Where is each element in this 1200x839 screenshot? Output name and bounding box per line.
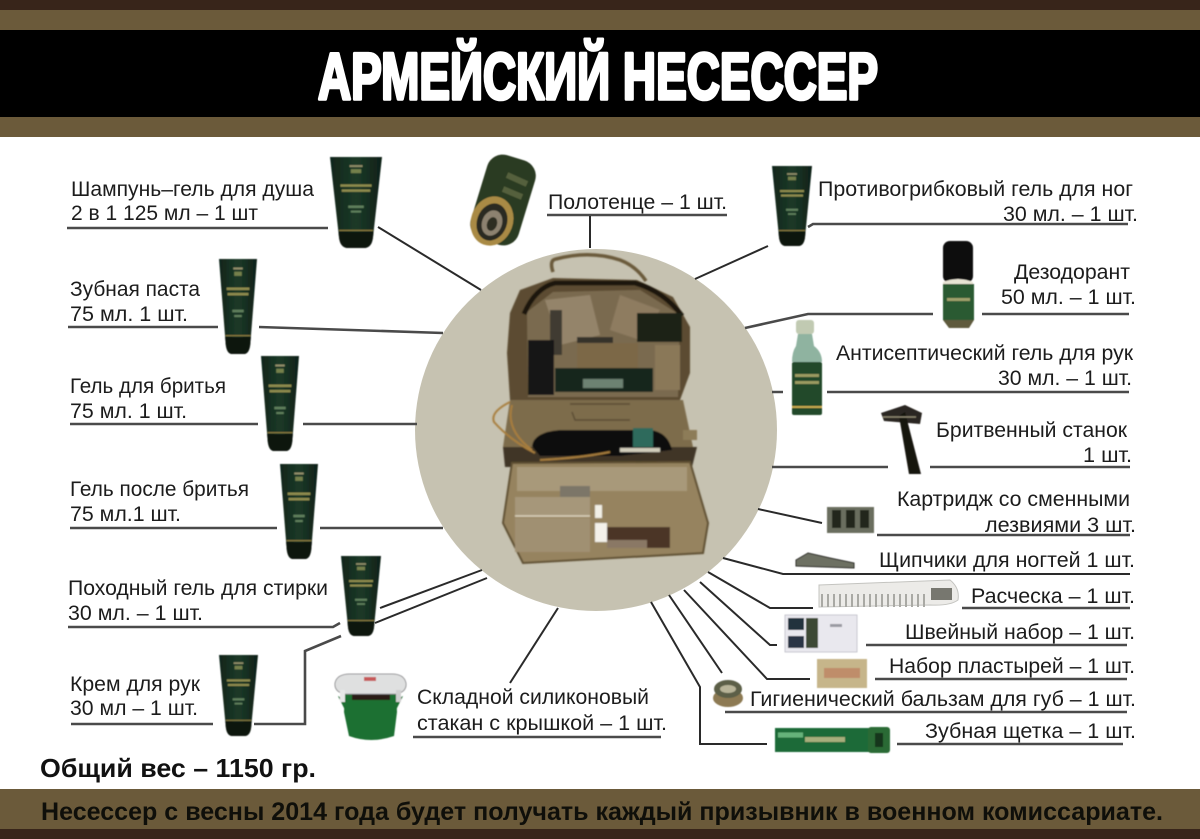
label: towel: Полотенце – 1 шт. <box>548 190 727 214</box>
label: silicone cup: Складной силиконовый <box>417 685 649 709</box>
leader lines and underlines <box>67 215 1130 744</box>
icon: shampoo tube <box>330 157 382 248</box>
label: comb: Расческа – 1 шт. <box>971 584 1135 608</box>
item: toothbrush <box>775 719 1136 753</box>
label: razor: 1 шт. <box>1083 443 1132 467</box>
item: hand cream <box>70 655 258 736</box>
icon: rolled towel <box>464 151 540 252</box>
item: shampoo <box>71 157 382 248</box>
item: lip balm <box>713 680 1136 711</box>
total weight: Общий вес – 1150 гр. <box>40 753 316 783</box>
item: comb <box>819 580 1135 608</box>
footer bands <box>0 789 1200 839</box>
label: foot gel: 30 мл. – 1 шт. <box>1003 202 1138 226</box>
label: deodorant: 50 мл. – 1 шт. <box>1001 285 1136 309</box>
item: deodorant <box>943 241 1136 328</box>
label: toothpaste <box>70 277 200 326</box>
icon: foot gel tube <box>772 166 812 246</box>
bag middle band <box>503 400 693 447</box>
label: cartridge: Картридж со сменными <box>897 487 1130 511</box>
top header bands <box>0 0 1200 137</box>
label: cartridge <box>897 487 1136 537</box>
icon: silicone cup with lid <box>335 674 406 740</box>
label: aftershave gel: 75 мл.1 шт. <box>70 502 181 526</box>
item: plasters <box>817 654 1135 688</box>
footer text: Несессер с весны 2014 года будет получать каждый призывник в военном комиссариате. <box>41 798 1163 826</box>
label: antiseptic gel <box>836 341 1134 390</box>
icon: blade cartridges <box>827 507 874 533</box>
icon: deodorant bottle <box>943 241 974 328</box>
icon: plasters <box>817 659 867 688</box>
icon: hand cream tube <box>219 655 258 736</box>
label: shaving gel <box>70 374 226 423</box>
label: lip balm: Гигиенический бальзам для губ – 1 шт. <box>750 687 1136 711</box>
icon: nail clippers <box>796 553 854 568</box>
label: shampoo <box>71 177 314 225</box>
label: laundry gel <box>68 576 328 625</box>
icon: spray bottle <box>792 320 822 415</box>
label: toothpaste: 75 мл. 1 шт. <box>70 302 188 326</box>
bag back panel <box>507 278 690 400</box>
icon: aftershave tube <box>280 464 318 559</box>
label: aftershave gel: Гель после бритья <box>70 477 249 501</box>
label: sewing kit: Швейный набор – 1 шт. <box>905 620 1135 644</box>
icon: toothbrush case <box>775 727 890 753</box>
bag handle <box>552 255 646 281</box>
item: razor <box>881 405 1132 474</box>
central bag image <box>493 255 708 563</box>
label: plasters: Набор пластырей – 1 шт. <box>889 654 1135 678</box>
label: aftershave gel <box>70 477 249 526</box>
label: laundry gel: 30 мл. – 1 шт. <box>68 601 203 625</box>
item: nail clippers <box>796 548 1135 572</box>
label: laundry gel: Походный гель для стирки <box>68 576 328 600</box>
icon: toothpaste tube <box>219 259 257 354</box>
item: cartridge <box>827 487 1136 537</box>
label: foot gel <box>818 177 1138 226</box>
item: towel <box>464 151 727 252</box>
central circle <box>415 249 777 611</box>
label: silicone cup <box>417 685 667 735</box>
icon: lip balm tin <box>713 680 743 707</box>
label: shampoo: Шампунь–гель для душа <box>71 177 314 201</box>
label: antiseptic gel: Антисептический гель для рук <box>836 341 1134 365</box>
item: sewing kit <box>785 615 1135 652</box>
label: shaving gel: Гель для бритья <box>70 374 226 398</box>
label: deodorant: Дезодорант <box>1014 260 1130 284</box>
label: shaving gel: 75 мл. 1 шт. <box>70 399 187 423</box>
item: silicone cup <box>335 674 667 740</box>
label: toothbrush: Зубная щетка – 1 шт. <box>925 719 1136 743</box>
label: deodorant <box>1001 260 1136 309</box>
label: shampoo: 2 в 1 125 мл – 1 шт <box>71 201 258 225</box>
icon: laundry gel tube <box>341 556 381 636</box>
label: razor: Бритвенный станок <box>936 418 1128 442</box>
item: aftershave gel <box>70 464 318 559</box>
item: foot gel <box>772 166 1138 246</box>
title: АРМЕЙСКИЙ НЕСЕССЕР <box>318 38 878 113</box>
item: shaving gel <box>70 356 299 451</box>
item: antiseptic gel <box>792 320 1134 415</box>
icon: sewing kit <box>785 615 857 652</box>
bag lower flap <box>503 462 708 563</box>
label: hand cream <box>70 672 201 720</box>
label: razor <box>936 418 1132 467</box>
icon: comb <box>819 580 958 607</box>
label: toothpaste: Зубная паста <box>70 277 200 301</box>
item: laundry gel <box>68 556 381 636</box>
label: silicone cup: стакан с крышкой – 1 шт. <box>417 711 667 735</box>
icon: shaving gel tube <box>261 356 299 451</box>
label: foot gel: Противогрибковый гель для ног <box>818 177 1133 201</box>
label: hand cream: Крем для рук <box>70 672 201 696</box>
item: toothpaste <box>70 259 257 354</box>
label: cartridge: лезвиями 3 шт. <box>985 513 1136 537</box>
label: antiseptic gel: 30 мл. – 1 шт. <box>998 366 1132 390</box>
label: hand cream: 30 мл – 1 шт. <box>70 696 198 720</box>
icon: razor <box>881 405 922 474</box>
label: nail clippers: Щипчики для ногтей 1 шт. <box>879 548 1135 572</box>
